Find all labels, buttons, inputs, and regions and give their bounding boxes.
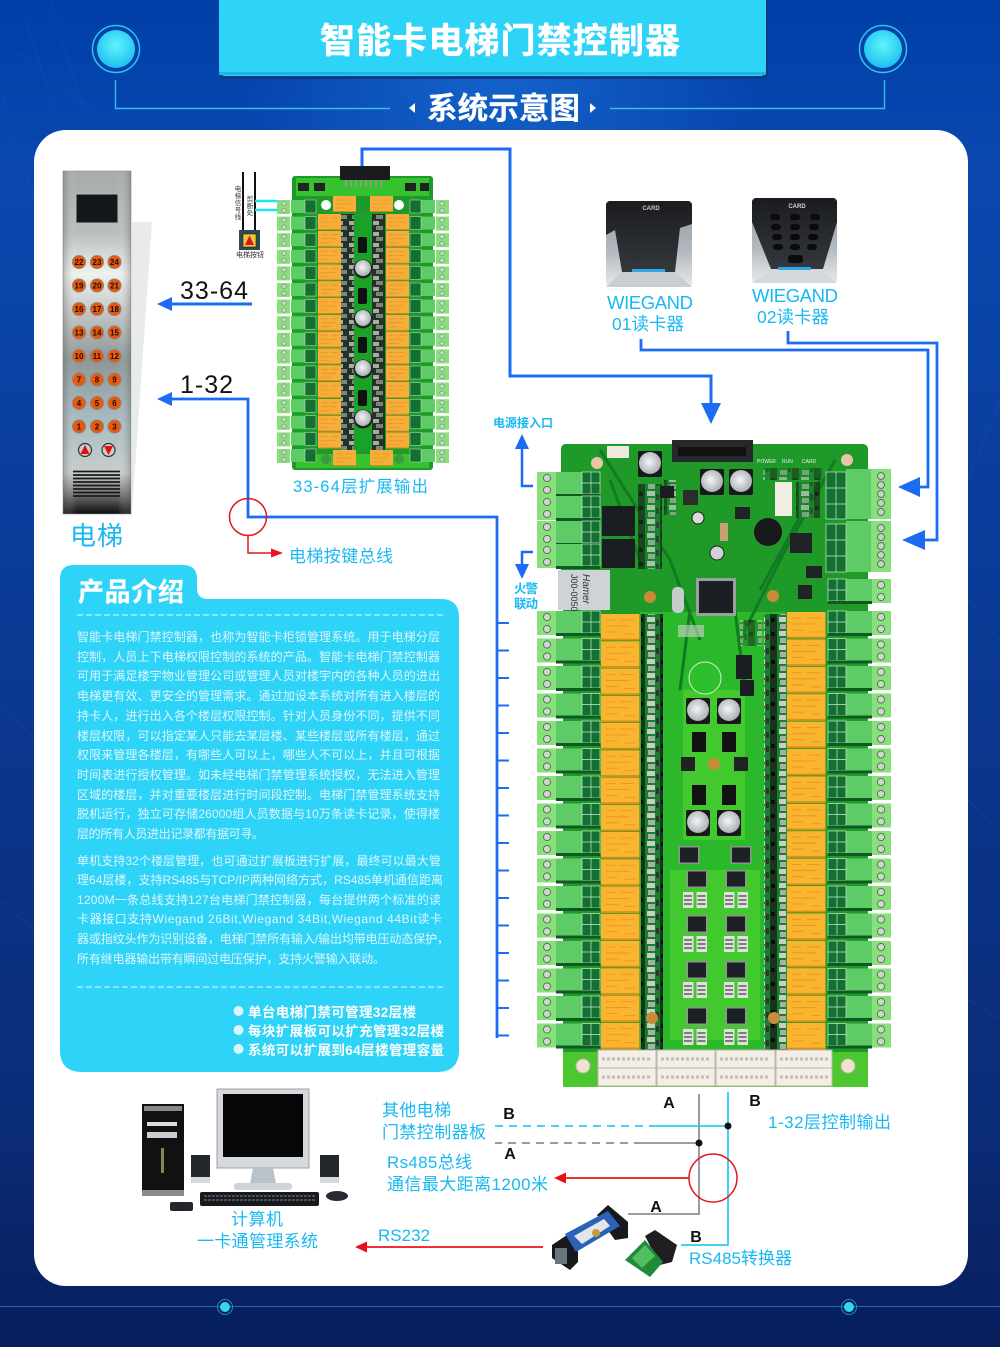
introduction paragraph 1: 脱机运行，独立可存储26000组人员数据与10万条读卡记录，使得楼 [77, 806, 440, 821]
introduction paragraph 1: 时间表进行授权管理。如未经电梯门禁管理系统授权，无法进入管理 [77, 767, 440, 782]
introduction paragraph 1: 控制，人员上下电梯权限控制的系统的产品。智能卡电梯门禁控制器 [77, 649, 440, 664]
floor buttons: 14 [93, 328, 102, 338]
wire labels A and B: B [690, 1229, 702, 1246]
floor buttons: 23 [93, 258, 102, 267]
main board top header and capacitors: RUN [782, 459, 793, 465]
elevator button wiring detail: 号 [235, 206, 242, 214]
elevator button wiring detail: 剪 [247, 194, 254, 203]
label: computer system: 计算机 [231, 1210, 283, 1229]
keypad [770, 214, 820, 263]
subtitle with bracket: 系统示意图 [427, 92, 580, 126]
wire: reader 01 to main board [641, 339, 928, 497]
elevator button wiring detail [235, 172, 277, 259]
main board left terminals lower [537, 611, 600, 1048]
card reader 01: CARD [642, 206, 660, 212]
introduction paragraph 1: 楼层权限，可以指定某人只能去某层楼、某些楼层或所有楼层，通过 [77, 728, 440, 743]
RS232 to RS485 converter [552, 1205, 677, 1277]
title banner: 智能卡电梯门禁控制器 [320, 22, 680, 61]
floor buttons: 4 [77, 399, 82, 408]
label: reader 02: 02读卡器 [757, 307, 829, 327]
decorative orb right [860, 26, 906, 72]
label: RS485 bus distance: 通信最大距离1200米 [387, 1175, 548, 1194]
wire labels A and B [503, 1093, 761, 1246]
introduction paragraph 1: 区域的楼层，并对重要楼层进行时间段控制。电梯门禁管理系统支持 [77, 787, 440, 802]
elevator panel [63, 171, 152, 514]
speakers [191, 1155, 339, 1183]
floor buttons: 9 [112, 376, 117, 384]
callout: RS485 bus [554, 1154, 737, 1202]
introduction paragraph 2 [77, 853, 449, 966]
label: computer system: 一卡通管理系统 [197, 1232, 318, 1251]
arrow: 33-64 to elevator [157, 297, 252, 311]
floor buttons: 24 [110, 258, 119, 267]
introduction paragraph 2: 器或指纹头作为识别设备，电梯门禁所有输入/输出均带电压动态保护， [77, 931, 449, 946]
main controller board [537, 440, 891, 1087]
floor buttons: 18 [110, 305, 119, 314]
elevator button wiring detail: 信 [235, 198, 242, 207]
heading: 产品介绍 [78, 577, 184, 607]
introduction paragraph 2: 卡器接口支持Wiegand 26Bit,Wiegand 34Bit,Wiegand 44Bit读卡 [77, 911, 442, 926]
floor buttons: 2 [95, 422, 100, 432]
label: reader 01 [607, 292, 693, 334]
wire: reader 02 to main board [788, 331, 937, 550]
decorative orb left [92, 26, 140, 72]
floor buttons: 20 [93, 282, 102, 290]
label: computer system [197, 1210, 318, 1251]
floor buttons: 15 [110, 328, 119, 338]
floor buttons: 16 [75, 305, 84, 314]
label: output floors: 1-32层控制输出 [768, 1113, 891, 1132]
expansion board 33-64 [277, 166, 449, 470]
label: other elevator boards [382, 1101, 486, 1142]
main board right terminals lower [828, 579, 891, 1048]
label: reader 01: WIEGAND [607, 292, 693, 313]
expansion board relays [318, 196, 409, 466]
callout: elevator button bus [230, 498, 393, 566]
converter terminal adapter [625, 1230, 677, 1277]
label: reader 02: WIEGAND [752, 285, 838, 306]
feature bullets: 系统可以扩展到64层楼管理容量 [248, 1042, 444, 1058]
label: other elevator boards: 门禁控制器板 [382, 1123, 486, 1142]
floor buttons: 3 [112, 422, 117, 432]
elevator display [76, 194, 118, 223]
label: fire alarm link: 联动 [514, 597, 538, 611]
floor buttons: 8 [95, 376, 100, 384]
up and down call buttons [78, 444, 115, 456]
wire labels A and B: A [650, 1199, 662, 1216]
card reader 01 [606, 201, 692, 287]
card reader 02 [752, 198, 837, 283]
wire labels A and B: A [663, 1095, 675, 1112]
feature bullets: 单台电梯门禁可管理32层楼 [248, 1004, 416, 1020]
introduction paragraph 2: 理64层楼，支持RS485与TCP/IP两种网络方式，RS485单机通信距离 [77, 872, 443, 887]
label: floors 33-64: 33-64 [180, 277, 248, 305]
introduction paragraph 1: 持卡人，进行出入各个楼层权限控制。针对人员身份不同，提供不同 [77, 708, 440, 723]
label: power input: 电源接入口 [493, 415, 553, 430]
wire labels A and B: B [503, 1106, 515, 1123]
bus wire: relay outputs to elevator [157, 392, 509, 1038]
floor buttons: 7 [77, 376, 82, 384]
introduction paragraph 1: 智能卡电梯门禁控制器，也称为智能卡柜锁管理系统。用于电梯分层 [77, 629, 440, 644]
footer line with nodes [0, 1300, 1000, 1314]
main board logic area [591, 454, 853, 646]
label: reader 02 [752, 285, 838, 327]
title banner [219, 0, 768, 79]
label: elevator: 电梯 [70, 521, 123, 551]
arrow: fire alarm link [515, 552, 533, 579]
floor buttons: 17 [93, 305, 102, 314]
floor buttons: 1 [77, 422, 82, 432]
main board RJ45 port [558, 570, 610, 612]
arrow: bus into main board [701, 403, 721, 424]
label: fire alarm link [514, 581, 538, 611]
elevator button wiring detail: 处 [247, 208, 254, 217]
introduction paragraph 1 [77, 629, 440, 841]
main board relays right [787, 612, 826, 1050]
subtitle with bracket [116, 80, 884, 126]
floor buttons: 21 [110, 282, 119, 290]
main board top header and capacitors: POWER [757, 459, 776, 465]
label: expansion output: 33-64层扩展输出 [293, 477, 428, 496]
arrow: RS232 [355, 1242, 543, 1252]
tower [142, 1104, 184, 1196]
computer illustration [142, 1089, 348, 1211]
label: floors 1-32: 1-32 [180, 371, 233, 399]
label: RS232: RS232 [378, 1226, 430, 1245]
label: RS485 bus distance: Rs485总线 [387, 1153, 472, 1172]
main board left terminals upper [537, 472, 600, 569]
introduction paragraph 2: 单机支持32个楼层管理，也可通过扩展板进行扩展，最终可以最大管 [77, 853, 441, 868]
floor buttons: 10 [75, 352, 84, 361]
RS485 bus wires [494, 1092, 732, 1245]
speaker grille [73, 472, 120, 496]
introduction paragraph 1: 权限来管理各楼层，有哪些人可以上，哪些人不可以上，并且可根据 [77, 747, 440, 762]
wire labels A and B: B [749, 1093, 761, 1110]
introduction paragraph 2: 1200M一条总线支持127台电梯门禁控制器，每台提供两个标准的读 [77, 892, 441, 907]
floor buttons: 12 [110, 352, 119, 361]
introduction paragraph 1: 可用于满足楼宇物业管理公司或管理人员对楼宇内的各种人员的进出 [77, 668, 440, 683]
main board relays left [601, 614, 640, 1049]
floor buttons: 5 [95, 399, 100, 408]
floor buttons: 13 [75, 328, 84, 338]
keyboard and mouse [170, 1191, 348, 1211]
callout: elevator button bus: 电梯按键总线 [289, 547, 393, 566]
floor buttons: 22 [75, 258, 84, 267]
label: converter: RS485转换器 [689, 1249, 792, 1268]
feature bullets: 每块扩展板可以扩充管理32层楼 [248, 1023, 444, 1039]
main board driver columns [641, 614, 786, 1050]
main board RJ45 port: J00-0050 [569, 574, 579, 612]
elevator button wiring detail: 电梯按钮 [236, 250, 264, 259]
introduction paragraph 1: 电梯更有效、更安全的管理需求。通过加设本系统对所有进入楼层的 [77, 688, 440, 703]
label: other elevator boards: 其他电梯 [382, 1101, 451, 1120]
bus wire: main board to expansion [362, 149, 711, 405]
floor buttons: 11 [93, 352, 102, 361]
elevator button wiring detail: 梯 [235, 191, 242, 200]
floor buttons: 6 [112, 399, 117, 408]
expansion board terminals left [277, 200, 316, 463]
product introduction panel [60, 565, 459, 1072]
introduction paragraph 1: 层的所有人员进出记录都有据可寻。 [77, 826, 264, 841]
expansion board centre components [341, 214, 385, 450]
floor buttons [72, 255, 121, 433]
main board bottom white connectors [576, 1050, 855, 1086]
main board wiegand terminals [826, 469, 891, 572]
expansion board header connector [298, 166, 429, 464]
elevator button wiring detail: 线 [235, 212, 242, 221]
monitor [217, 1089, 309, 1190]
label: RS485 bus distance [387, 1153, 548, 1194]
expansion board terminals right [410, 200, 449, 463]
main board power section capacitors [681, 655, 754, 836]
label: fire alarm link: 火警 [514, 581, 538, 596]
card reader 02: CARD [788, 204, 806, 210]
feature bullets [234, 1004, 444, 1058]
floor buttons: 19 [75, 282, 84, 290]
main board RJ45 port: Hamer [580, 574, 591, 605]
introduction paragraph 2: 所有继电器输出带有瞬间过电压保护，支持火警输入联动。 [77, 951, 385, 966]
label: reader 01: 01读卡器 [612, 314, 684, 334]
arrow: power input [515, 434, 533, 486]
main board top header and capacitors: CARD [802, 459, 817, 465]
wire labels A and B: A [504, 1146, 516, 1163]
elevator button wiring detail: 电 [235, 184, 242, 193]
main board driver chips [646, 846, 780, 1045]
elevator button wiring detail: 断 [247, 201, 254, 210]
main board top header and capacitors [607, 440, 817, 495]
